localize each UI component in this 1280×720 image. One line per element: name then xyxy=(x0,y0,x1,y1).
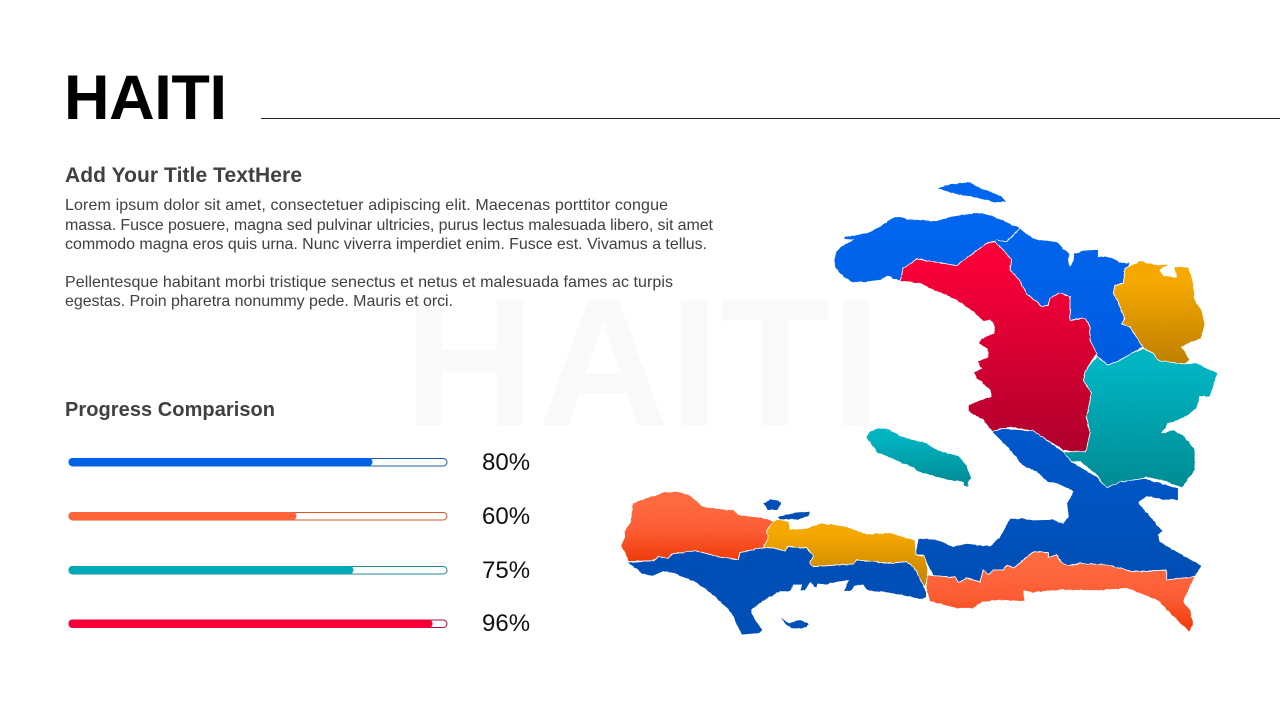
region: north (blue) xyxy=(834,182,1143,365)
bar: 75% xyxy=(68,557,530,584)
watermark: HAITI xyxy=(404,262,881,464)
progress heading: Progress Comparison xyxy=(65,399,275,421)
text block: description xyxy=(65,164,714,310)
region: artibonite (red) xyxy=(900,242,1097,453)
region: nippes (amber) xyxy=(763,519,928,588)
bar: 75%: 75% xyxy=(482,557,530,584)
region: ouest (deep blue) xyxy=(915,428,1202,583)
region: sud (deep blue) xyxy=(627,499,927,635)
paragraph one: Lorem ipsum dolor sit amet, consectetuer adipiscing elit. Maecenas porttitor congue xyxy=(65,197,668,214)
paragraph two xyxy=(65,274,673,310)
title: HAITI xyxy=(64,63,227,133)
bar: 96%: 96% xyxy=(482,610,530,637)
paragraph one xyxy=(65,197,714,253)
region: centre (teal) xyxy=(1063,348,1217,488)
map of Haiti xyxy=(621,182,1217,635)
region: grand'anse (orange) xyxy=(621,492,773,562)
bar: 96% xyxy=(68,610,530,637)
panel: progress comparison xyxy=(65,399,530,637)
island: la gonave (teal) xyxy=(867,428,972,487)
paragraph one: massa. Fusce posuere, magna sed pulvinar ultricies, purus lectus malesuada libero, sit amet xyxy=(65,217,714,234)
paragraph one: commodo magna eros quis urna. Nunc viverra imperdiet enim. Fusce est. Vivamus a tellus. xyxy=(65,236,707,253)
paragraph two: egestas. Proin pharetra nonummy pede. Mauris et orci. xyxy=(65,293,453,310)
title rule xyxy=(261,118,1280,119)
region: north-east (amber) xyxy=(1113,261,1205,364)
bar: 80% xyxy=(68,449,530,476)
subheading: Add Your Title TextHere xyxy=(65,164,302,187)
region: south-east (orange) xyxy=(927,552,1195,632)
bar: 80%: 80% xyxy=(482,449,530,476)
paragraph two: Pellentesque habitant morbi tristique senectus et netus et malesuada fames ac turpis xyxy=(65,274,673,291)
bar: 60% xyxy=(68,503,530,530)
bar: 60%: 60% xyxy=(482,503,530,530)
